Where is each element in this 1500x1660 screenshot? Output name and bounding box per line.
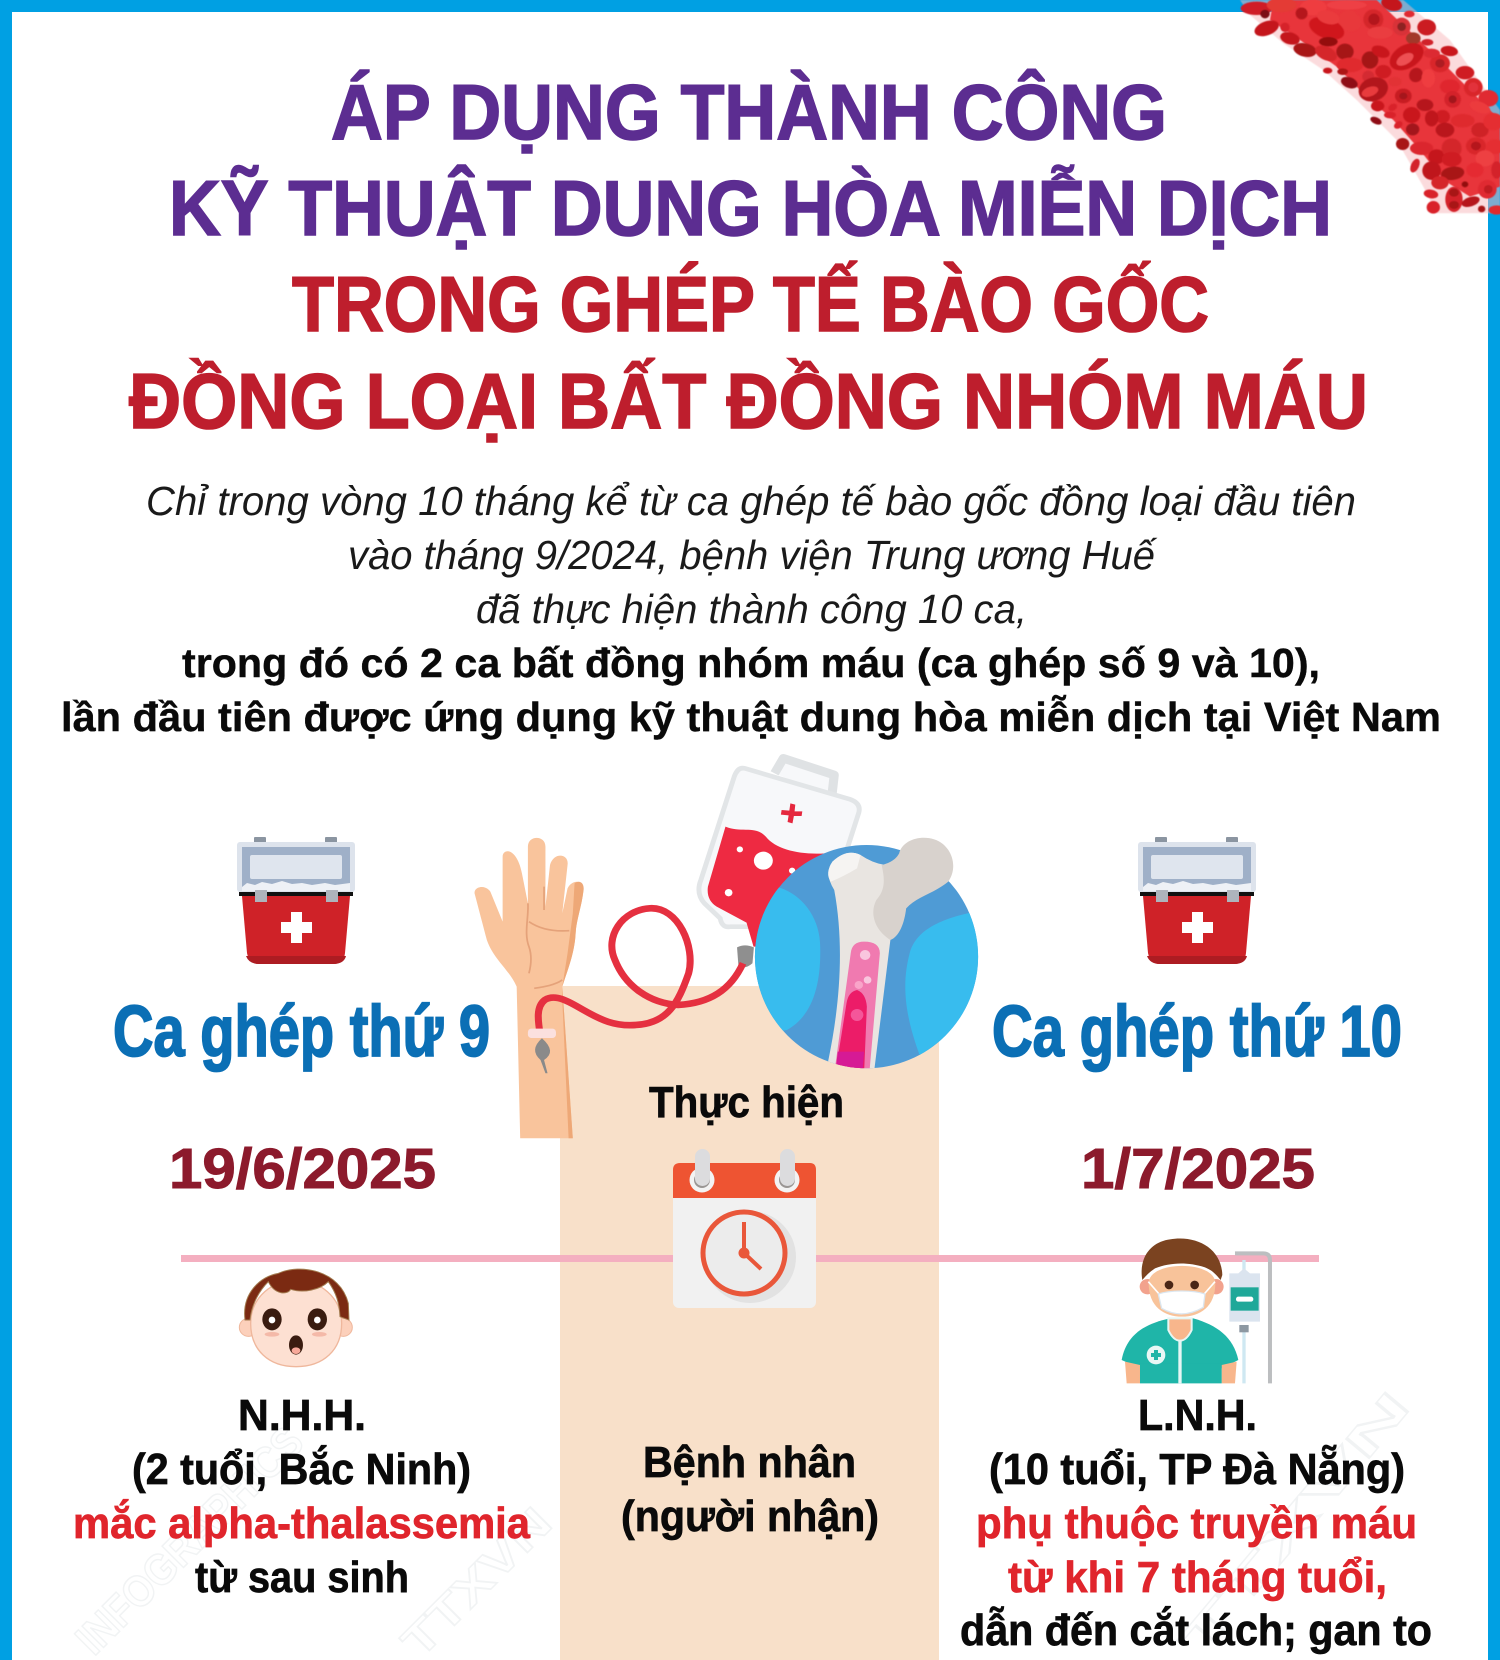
text: patient 9: mắc alpha-thalassemia — [73, 1498, 530, 1548]
text: patient 10: dẫn đến cắt lách; gan to — [960, 1605, 1432, 1655]
icon: blood bag — [699, 758, 859, 967]
date: case 10: 1/7/2025 — [1081, 1137, 1315, 1201]
heading: case 9: Ca ghép thứ 9 — [113, 992, 490, 1072]
icon: calendar clock — [673, 1149, 816, 1308]
text: patient 10: L.N.H. — [1138, 1391, 1257, 1440]
title: ÁP DỤNG THÀNH CÔNG — [331, 68, 1167, 156]
watermark: INFOGRAPHICS — [66, 1417, 313, 1660]
intro text: lần đầu tiên được ứng dụng kỹ thuật dung hòa miễn dịch tại Việt Nam — [61, 694, 1441, 740]
icon: bone circle — [754, 838, 978, 1068]
panel: centre column — [560, 986, 939, 1660]
icon: IV tube — [528, 908, 743, 1073]
icon: hand — [475, 838, 584, 1138]
intro text — [61, 478, 1441, 740]
text: patient 10 — [960, 1391, 1432, 1655]
text: patient 9: (2 tuổi, Bắc Ninh) — [132, 1444, 471, 1494]
title — [129, 68, 1368, 445]
watermark — [66, 1382, 1420, 1660]
label: performed: Thực hiện — [649, 1078, 844, 1127]
text: recipient label — [621, 1438, 879, 1541]
title: TRONG GHÉP TẾ BÀO GỐC — [292, 260, 1209, 348]
timeline line — [181, 1255, 1319, 1262]
intro text: Chỉ trong vòng 10 tháng kể từ ca ghép tế bào gốc đồng loại đầu tiên — [146, 478, 1356, 524]
text: patient 9 — [73, 1391, 530, 1602]
red blood cells decoration — [1240, 0, 1500, 215]
text: recipient label: (người nhận) — [621, 1492, 879, 1541]
date: case 9: 19/6/2025 — [169, 1137, 436, 1201]
text: patient 10: (10 tuổi, TP Đà Nẵng) — [989, 1443, 1405, 1494]
intro text: đã thực hiện thành công 10 ca, — [476, 586, 1027, 632]
text: patient 9: N.H.H. — [238, 1391, 366, 1440]
title: KỸ THUẬT DUNG HÒA MIỄN DỊCH — [169, 164, 1332, 252]
title: ĐỒNG LOẠI BẤT ĐỒNG NHÓM MÁU — [129, 357, 1368, 445]
intro text: trong đó có 2 ca bất đồng nhóm máu (ca ghép số 9 và 10), — [182, 640, 1320, 686]
icon: medical cooler left — [237, 837, 355, 964]
text: patient 10: từ khi 7 tháng tuổi, — [1008, 1553, 1387, 1602]
text: patient 10: phụ thuộc truyền máu — [976, 1499, 1417, 1548]
intro text: vào tháng 9/2024, bệnh viện Trung ương Huế — [348, 532, 1158, 578]
text: recipient label: Bệnh nhân — [643, 1438, 856, 1487]
text: patient 9: từ sau sinh — [195, 1553, 409, 1602]
illustration: hand, IV bag and bone — [475, 758, 1011, 1138]
icon: patient with IV drip — [1122, 1239, 1270, 1383]
icon: medical cooler right — [1138, 837, 1256, 964]
icon: baby face — [239, 1269, 352, 1367]
